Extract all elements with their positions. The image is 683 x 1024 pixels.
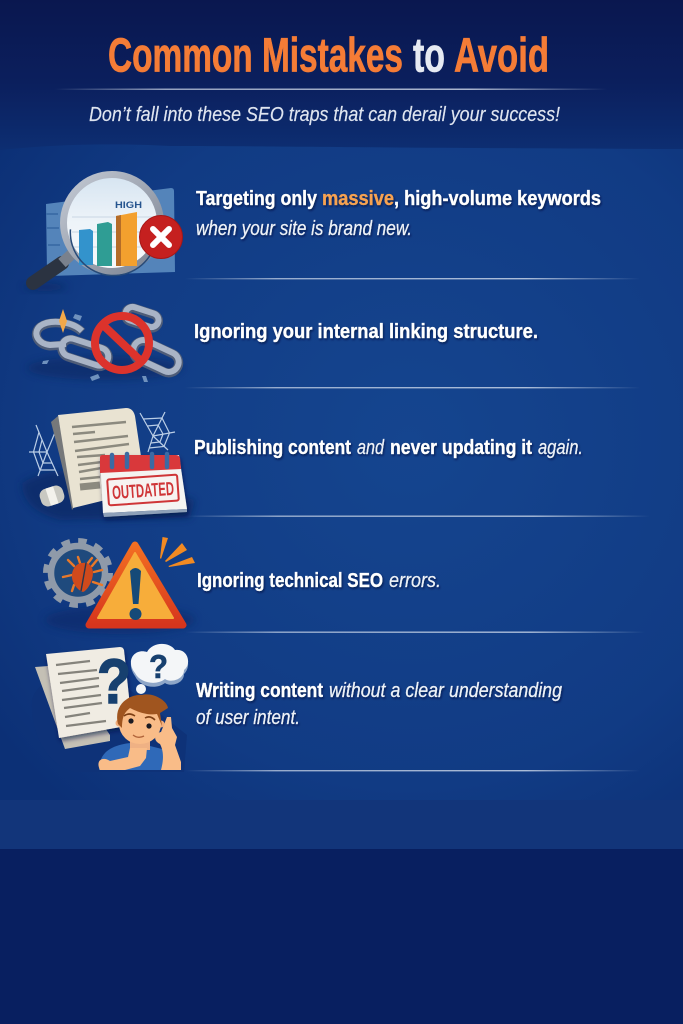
back page [35, 665, 110, 749]
magnifier handle [33, 263, 62, 283]
subtitle: Don’t fall into these SEO traps that can derail your success! [89, 104, 560, 126]
text: mistake 5: without a clear understanding [329, 680, 562, 702]
icon: outdated document with calendar and cobwebs [22, 408, 195, 520]
icon: gear with bug and warning triangle [45, 537, 195, 634]
boy [98, 694, 181, 770]
calendar [100, 455, 187, 517]
bug [63, 557, 102, 592]
icon: broken chain links with prohibition sign [27, 305, 183, 382]
spark [59, 309, 67, 333]
red x badge [140, 216, 182, 258]
cobwebs [29, 412, 175, 476]
chain links [36, 305, 182, 376]
text: mistake 3: and [357, 437, 385, 459]
outdated stamp: OUTDATED [111, 479, 175, 504]
text: mistake 1: massive [322, 187, 394, 210]
title: to [413, 30, 445, 82]
question mark: ? [97, 647, 131, 717]
title: Common Mistakes [108, 30, 403, 82]
bar chart [79, 212, 137, 266]
title: Avoid [454, 30, 549, 82]
front page [46, 647, 132, 738]
text: mistake 3: never updating it [390, 436, 532, 459]
text: mistake 5: Writing content [196, 679, 323, 702]
text: mistake 2: Ignoring your internal linking structure. [194, 320, 538, 343]
prohibition sign [95, 316, 149, 370]
icon: magnifying glass over high-volume chart: HIGH [115, 200, 142, 211]
alert rays [160, 537, 195, 567]
text: mistake 5: of user intent. [196, 707, 300, 729]
icon: magnifying glass over high-volume chart [23, 174, 182, 291]
text: mistake 1 [196, 187, 601, 240]
outdated stamp [107, 475, 179, 505]
text: mistake 4: errors. [389, 570, 441, 592]
text: mistake 1: Targeting only [196, 187, 318, 210]
aged paper [51, 416, 75, 510]
text: mistake 3 [194, 436, 583, 459]
icon: confused writer with document and thought bubble [32, 644, 188, 772]
text: mistake 4: Ignoring technical SEO [197, 569, 383, 592]
scroll [38, 484, 66, 508]
debris [42, 314, 148, 382]
text: mistake 1: when your site is brand new. [196, 218, 412, 240]
text: mistake 1: , high-volume keywords [394, 187, 601, 210]
warning triangle [89, 545, 183, 625]
gear [46, 541, 110, 605]
thought bubble [131, 644, 188, 694]
text: mistake 3: Publishing content [194, 436, 351, 459]
text: mistake 5 [196, 679, 562, 729]
thought bubble: ? [149, 648, 168, 685]
text: mistake 3: again. [538, 437, 583, 459]
